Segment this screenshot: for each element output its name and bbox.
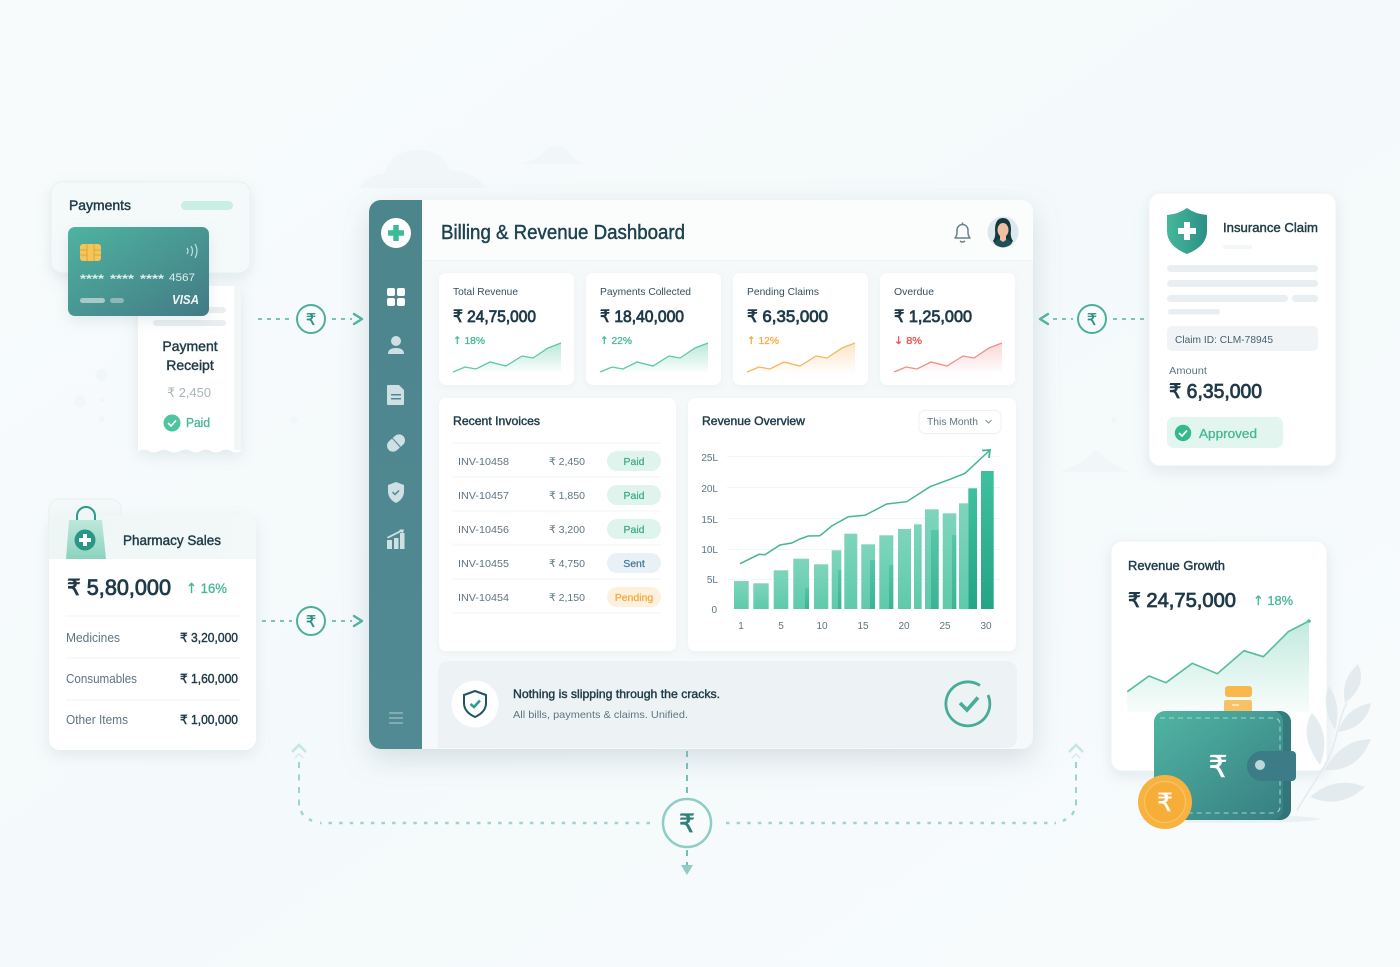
heading: payments: Payments: [69, 197, 131, 213]
approved status: [1167, 417, 1283, 448]
flow connector: bottom loop: [292, 745, 1083, 875]
panel: revenue overview: Revenue Overview: [702, 414, 805, 428]
chart: revenue bars and trend: 0: [711, 605, 717, 616]
paid status: [164, 414, 210, 432]
stat card: pending claims: [733, 273, 868, 385]
chart: revenue bars and trend: 20: [898, 621, 910, 632]
icon: shield: [388, 482, 404, 503]
arrow: payments to dashboard: ₹: [306, 312, 316, 329]
panel: pharmacy sales: [49, 499, 256, 750]
icon: document: [387, 385, 404, 405]
banner: nothing is slipping: All bills, payments & claims. Unified.: [513, 709, 688, 721]
chart: revenue bars and trend: 10L: [701, 545, 718, 556]
claim id: Claim ID: CLM-78945: [1175, 334, 1273, 346]
claim amount: ₹ 6,35,000: [1169, 381, 1262, 403]
panel: revenue growth: ₹ 24,75,000: [1128, 590, 1236, 612]
stat card: total revenue: ₹ 24,75,000: [453, 307, 536, 326]
icon: wallet with coins: [1138, 686, 1320, 829]
arrow: payments to dashboard: [258, 305, 362, 333]
stat card: overdue: [880, 273, 1015, 385]
dashboard title: Billing & Revenue Dashboard: [441, 222, 685, 244]
row: consumables: [66, 672, 238, 686]
invoice row 10455: INV-10455: [458, 558, 509, 570]
invoice row 10457: ₹ 1,850: [549, 490, 585, 502]
invoice row 10457: Paid: [623, 490, 645, 502]
icon: grid: [387, 288, 405, 306]
row: medicines: ₹ 3,20,000: [180, 631, 238, 645]
row: medicines: [66, 631, 238, 645]
icon: pill: [385, 432, 407, 454]
icon: shopping bag: [66, 507, 106, 559]
stat card: total revenue: ↑ 18%: [453, 335, 485, 347]
row: other items: Other Items: [66, 713, 128, 727]
row: other items: ₹ 1,00,000: [180, 713, 238, 727]
chart: revenue bars and trend: 10: [816, 621, 828, 632]
chart: revenue bars and trend: 1: [738, 621, 744, 632]
panel: revenue growth: [1111, 541, 1327, 771]
chart: revenue bars and trend: 15L: [701, 515, 718, 526]
invoice row 10455: Sent: [623, 558, 645, 570]
flow connector: bottom loop: ₹: [679, 810, 695, 838]
icon: credit card: VISA: [172, 293, 199, 307]
invoice row 10457: INV-10457: [458, 490, 509, 502]
pharmacy growth: ↑ 16%: [186, 580, 227, 597]
icon: bell: [955, 222, 970, 242]
chart: revenue bars and trend: 25L: [701, 453, 718, 464]
panel: revenue overview: [688, 398, 1016, 651]
icon: check ring: [946, 682, 990, 726]
banner: nothing is slipping: Nothing is slipping through the cracks.: [513, 687, 720, 701]
icon: credit card: 4567: [169, 272, 195, 284]
invoice row 10456: ₹ 3,200: [549, 524, 585, 536]
arrow: insurance to dashboard: ₹: [1087, 312, 1097, 329]
icon: rupee coin: ₹: [1157, 789, 1173, 817]
icon: credit card: ****: [140, 272, 164, 286]
stat card: payments collected: [586, 273, 721, 385]
stat card: total revenue: Total Revenue: [453, 286, 518, 298]
pharmacy total: ₹ 5,80,000: [67, 575, 171, 600]
icon: credit card: ****: [110, 272, 134, 286]
chart: revenue bars and trend: 30: [980, 621, 992, 632]
icon: credit card: ****: [80, 272, 104, 286]
stat card: pending claims: Pending Claims: [747, 286, 819, 298]
row: other items: [66, 713, 238, 727]
icon: wallet with coins: ₹: [1208, 751, 1228, 784]
panel: recent invoices: [439, 398, 676, 651]
invoice row 10458: ₹ 2,450: [549, 456, 585, 468]
icon: user: [388, 336, 404, 354]
invoice row 10455: ₹ 4,750: [549, 558, 585, 570]
icon: bar chart: [387, 530, 404, 549]
icon: rupee coin: [1138, 775, 1192, 829]
panel: insurance claim: [1149, 193, 1336, 466]
claim id: [1167, 326, 1318, 351]
decoration: leaves: [1297, 664, 1371, 810]
stat card: total revenue: [439, 273, 574, 385]
panel: revenue growth: ↑ 18%: [1253, 593, 1293, 609]
approved status: Approved: [1199, 426, 1257, 441]
stat card: payments collected: ↑ 22%: [600, 335, 632, 347]
avatar: [988, 216, 1018, 248]
invoice row 10456: Paid: [623, 524, 645, 536]
invoice row 10458: Paid: [623, 456, 645, 468]
insurance heading: Insurance Claim: [1223, 220, 1318, 235]
chart: revenue bars and trend: 5: [778, 621, 784, 632]
icon: shield plus: [1167, 208, 1207, 254]
growth chart: [1127, 619, 1311, 712]
receipt amount: ₹ 2,450: [167, 385, 211, 400]
chart: revenue bars and trend: 25: [939, 621, 951, 632]
banner: nothing is slipping: [438, 661, 1017, 748]
stat card: overdue: ↓ 8%: [894, 335, 922, 347]
invoice row 10454: ₹ 2,150: [549, 592, 585, 604]
stat card: pending claims: ↑ 12%: [747, 335, 779, 347]
panel: recent invoices: Recent Invoices: [453, 414, 540, 428]
arrow: pharmacy to dashboard: [262, 607, 362, 635]
claim amount: Amount: [1169, 365, 1207, 377]
invoice row 10457: [458, 485, 661, 505]
coins in wallet: [1224, 686, 1252, 712]
paid status: Paid: [186, 416, 210, 430]
arrow: insurance to dashboard: [1040, 305, 1145, 333]
invoice row 10456: INV-10456: [458, 524, 509, 536]
icon: logo: [381, 218, 411, 248]
invoice row 10455: [458, 553, 661, 573]
pharmacy heading: Pharmacy Sales: [123, 532, 221, 548]
invoice row 10454: INV-10454: [458, 592, 509, 604]
stat card: payments collected: ₹ 18,40,000: [600, 307, 684, 326]
arrow: pharmacy to dashboard: ₹: [306, 614, 316, 631]
sidebar: [369, 200, 422, 749]
panel: payments card: [51, 182, 250, 273]
dropdown: this month: This Month: [927, 416, 978, 428]
row: medicines: Medicines: [66, 631, 120, 645]
invoice row 10456: [458, 519, 661, 539]
chart: revenue bars and trend: [701, 450, 1000, 632]
invoice row 10454: [458, 587, 661, 607]
invoice row 10458: [458, 451, 661, 471]
claim amount: [1169, 365, 1262, 403]
panel: revenue growth: Revenue Growth: [1128, 559, 1225, 573]
row: consumables: Consumables: [66, 672, 137, 686]
receipt title: Payment: [162, 338, 218, 354]
stat card: payments collected: Payments Collected: [600, 286, 691, 298]
chart: revenue bars and trend: 20L: [701, 484, 718, 495]
panel: main dashboard: [292, 193, 1371, 875]
receipt title: Receipt: [166, 357, 214, 373]
row: consumables: ₹ 1,60,000: [180, 672, 238, 686]
panel: payment receipt: [138, 286, 241, 452]
icon: menu: [389, 713, 403, 723]
stat card: pending claims: ₹ 6,35,000: [747, 307, 828, 326]
invoice row 10458: INV-10458: [458, 456, 509, 468]
invoice row 10454: Pending: [615, 592, 653, 604]
stat card: overdue: ₹ 1,25,000: [894, 307, 972, 326]
chart: revenue bars and trend: 15: [857, 621, 869, 632]
dropdown: this month: [919, 410, 1001, 434]
chart: revenue bars and trend: 5L: [707, 575, 718, 586]
icon: credit card: [68, 227, 209, 316]
stat card: overdue: Overdue: [894, 286, 934, 298]
icon: shield check: [464, 691, 486, 717]
